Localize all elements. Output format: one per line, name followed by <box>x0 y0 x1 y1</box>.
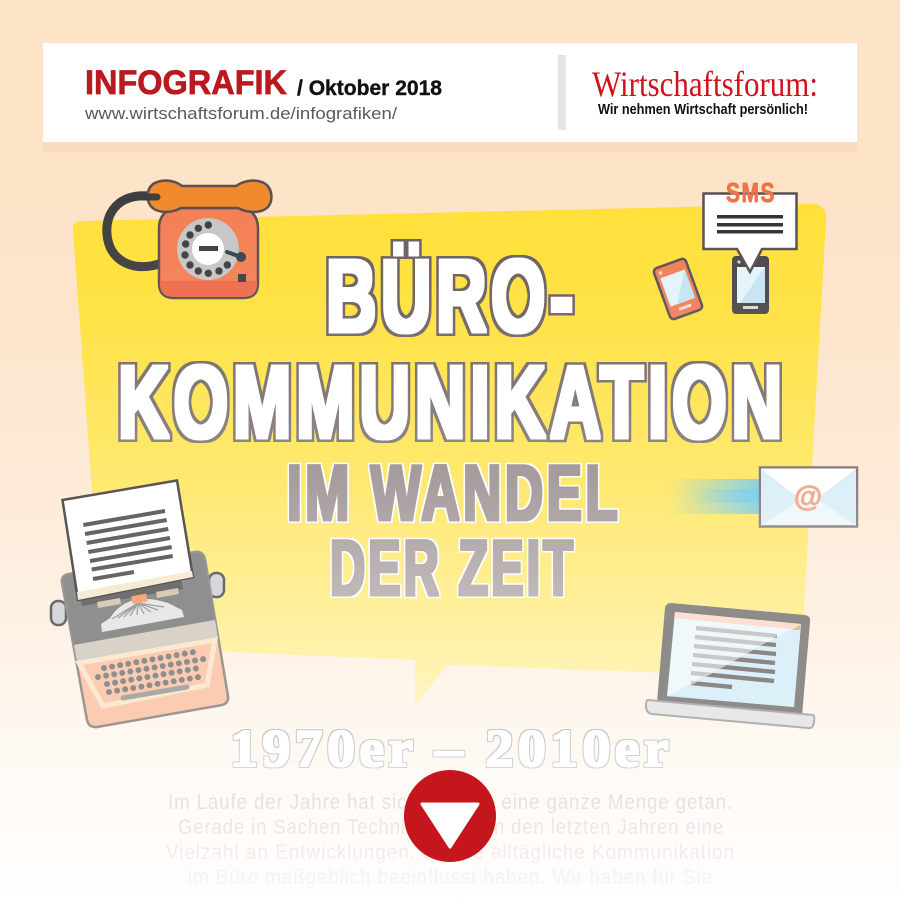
intro text: Gerade in Sachen Technik gab es in den letzten Jahren eine <box>178 816 724 839</box>
icon: laptop <box>646 603 814 728</box>
subtitle: im Wandel der Zeit <box>287 448 621 612</box>
icon: envelope with speed trail <box>668 468 857 526</box>
icon: envelope with speed trail: @ <box>794 481 822 513</box>
icon: SMS speech bubble: SMS <box>726 177 776 208</box>
subtitle: im Wandel der Zeit: IM WANDEL <box>287 448 621 537</box>
document lines <box>691 628 777 687</box>
speech bubble <box>73 204 826 706</box>
title: Büro-: BÜRO- <box>326 238 578 354</box>
icon: typewriter <box>51 480 228 727</box>
intro text: Im Laufe der Jahre hat sich im Büro eine ganze Menge getan. <box>168 791 733 814</box>
intro text <box>166 791 735 900</box>
icon: SMS speech bubble <box>704 177 796 272</box>
logo <box>592 64 818 118</box>
scroll-down button <box>404 770 496 862</box>
heading: Infografik: INFOGRAFIK <box>85 64 287 102</box>
icon: black smartphone <box>732 256 769 314</box>
logo: Wirtschaftsforum: <box>592 64 818 104</box>
logo: Wir nehmen Wirtschaft persönlich! <box>598 101 808 118</box>
subtitle: im Wandel der Zeit: DER ZEIT <box>330 523 576 612</box>
date: / Oktober 2018 <box>297 77 442 100</box>
intro text: Vielzahl an Entwicklungen, die die alltägliche Kommunikation <box>166 841 735 864</box>
date range heading: 1970er – 2010er <box>230 720 673 778</box>
intro text: im Büro maßgeblich beeinflusst haben. Wir haben für Sie <box>188 866 713 889</box>
header panel <box>43 43 857 152</box>
icon: small orange phone <box>653 258 703 320</box>
divider <box>558 55 566 130</box>
paper <box>62 480 193 600</box>
url: www.wirtschaftsforum.de/infografiken/ <box>84 104 397 123</box>
icon: rotary telephone <box>107 180 272 298</box>
